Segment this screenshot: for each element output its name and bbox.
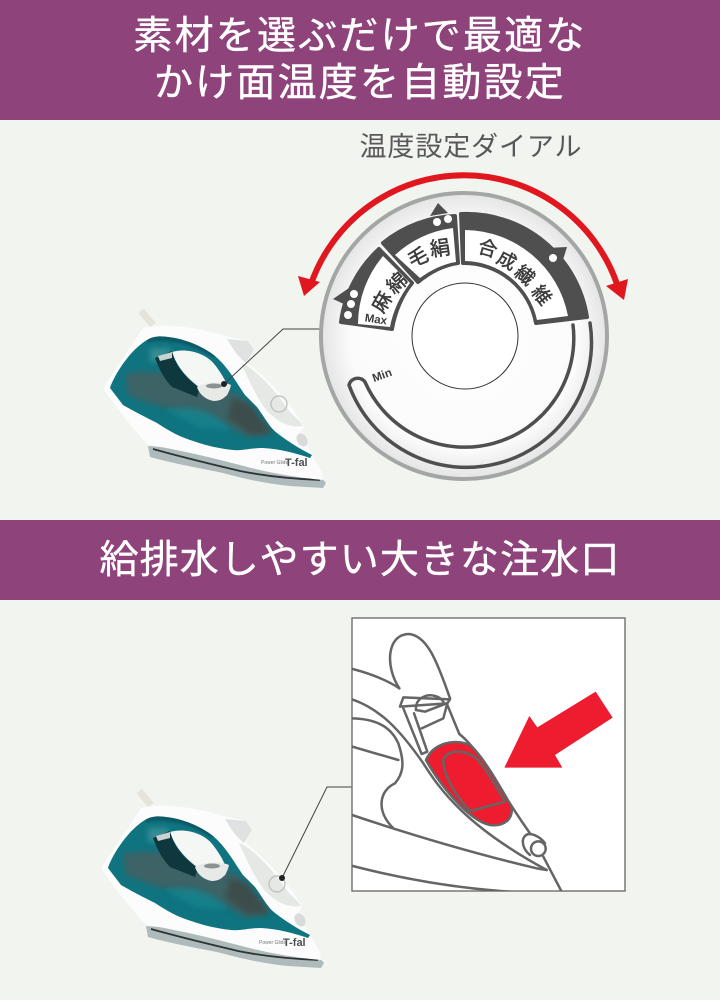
cord	[139, 791, 151, 805]
top spout and controls	[227, 339, 254, 363]
top spout and controls	[225, 819, 252, 843]
leader line: iron to dial	[221, 329, 320, 387]
red water inlet	[426, 742, 512, 825]
knob	[523, 834, 545, 855]
segment: synthetic fibres: 繊	[510, 261, 539, 290]
handle opening	[172, 351, 228, 396]
centre circle	[412, 283, 518, 389]
segment: wool and silk: 絹	[429, 236, 452, 261]
temperature dial on handle	[195, 863, 229, 881]
red double arrow around dial	[298, 175, 628, 300]
min label: Min	[371, 367, 394, 385]
heading band: water inlet	[0, 520, 720, 600]
red arrow pointing to inlet	[504, 692, 613, 768]
soleplate	[146, 926, 324, 968]
leader line: iron to inlet panel	[279, 787, 352, 881]
panel: water inlet close-up	[350, 618, 625, 892]
body	[103, 326, 323, 480]
segment: synthetic fibres: 成	[493, 247, 520, 275]
temperature dial	[321, 193, 607, 479]
illustrations	[102, 132, 628, 968]
heading band: automatic temperature	[0, 0, 720, 120]
cord	[141, 311, 153, 325]
iron illustration (bottom): T-fal	[283, 937, 306, 949]
dial face	[321, 193, 607, 479]
body	[101, 806, 321, 960]
heading band: automatic temperature: 素材を選ぶだけで最適な	[133, 15, 587, 58]
heading band: automatic temperature: かけ面温度を自動設定	[154, 62, 566, 105]
iron illustration (top)	[103, 311, 326, 488]
temperature dial on handle	[197, 383, 231, 401]
shell shading	[125, 338, 272, 438]
handle shadow	[155, 351, 200, 397]
segment: wool and silk: 毛	[405, 243, 432, 272]
teal shell	[110, 336, 312, 458]
segment: linen and cotton: Max	[364, 312, 388, 328]
segment: synthetic fibres: 合	[476, 236, 500, 262]
handle opening	[170, 831, 226, 876]
shell shading	[123, 818, 270, 918]
segment: wool and silk	[383, 203, 458, 282]
segment: linen and cotton: 麻	[367, 288, 397, 317]
line drawing of iron	[350, 634, 562, 892]
min track	[349, 323, 592, 467]
handle shadow	[153, 831, 198, 877]
soleplate	[148, 446, 326, 488]
panel frame	[352, 618, 625, 891]
teal shell	[108, 816, 310, 938]
label: temperature dial: 温度設定ダイアル	[360, 132, 582, 162]
segment: synthetic fibres: 維	[527, 281, 556, 310]
brand text: Power Glide	[259, 940, 286, 946]
iron illustration (top): T-fal	[285, 457, 308, 469]
segment: linen and cotton	[333, 249, 412, 329]
brand text: Power Glide	[261, 460, 288, 466]
heading band: water inlet: 給排水しやすい大きな注水口	[100, 539, 620, 582]
iron illustration (bottom)	[101, 791, 324, 968]
segment: linen and cotton: 綿	[382, 268, 412, 299]
segment: synthetic fibres	[461, 214, 587, 323]
